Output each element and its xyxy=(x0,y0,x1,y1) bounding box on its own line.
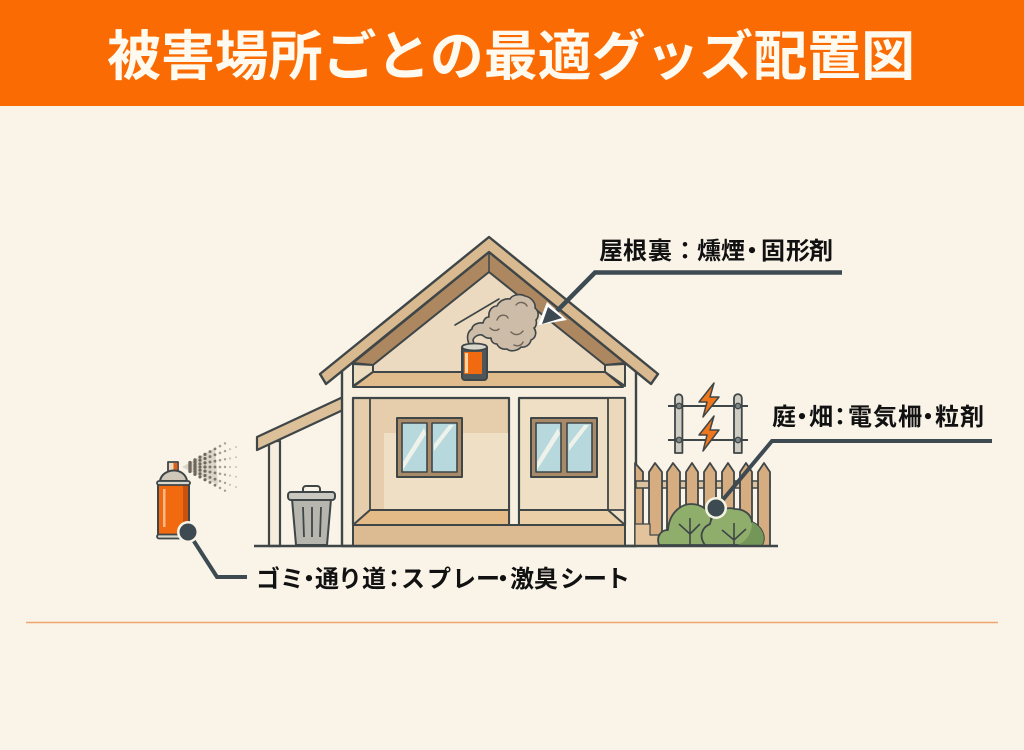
icon: lightning bolts xyxy=(699,383,719,451)
label: attic: 屋根裏：燻煙・固形剤 xyxy=(599,237,833,265)
spray can xyxy=(157,462,190,538)
arrow: attic label xyxy=(538,272,842,325)
attic beam xyxy=(353,372,623,387)
title banner xyxy=(0,0,1024,106)
ground line xyxy=(254,545,778,547)
attic corner braces xyxy=(353,364,373,386)
foundation xyxy=(353,525,625,546)
smoke xyxy=(455,295,538,351)
wooden fence xyxy=(635,463,770,546)
label: garden and field: 庭・畑：電気柵・粒剤 xyxy=(772,404,984,431)
pointer: spray label xyxy=(177,521,247,577)
spray mist xyxy=(182,442,237,492)
electric fence xyxy=(668,383,748,453)
left room xyxy=(353,398,509,525)
gable xyxy=(353,262,623,372)
left window xyxy=(397,418,462,477)
roof xyxy=(320,237,658,384)
trash can xyxy=(288,486,335,545)
right window xyxy=(531,418,597,477)
bushes xyxy=(658,504,764,545)
lean-to shed xyxy=(257,397,343,546)
bottom divider xyxy=(26,622,998,624)
smoke canister xyxy=(462,344,487,380)
house illustration xyxy=(257,237,658,546)
title: 被害場所ごとの最適グッズ配置図 xyxy=(107,27,915,87)
pointer: garden label xyxy=(705,441,992,519)
house walls xyxy=(342,360,636,546)
label: garbage and paths: ゴミ・通り道：スプレー・激臭シート xyxy=(256,565,630,593)
right room xyxy=(519,398,625,525)
